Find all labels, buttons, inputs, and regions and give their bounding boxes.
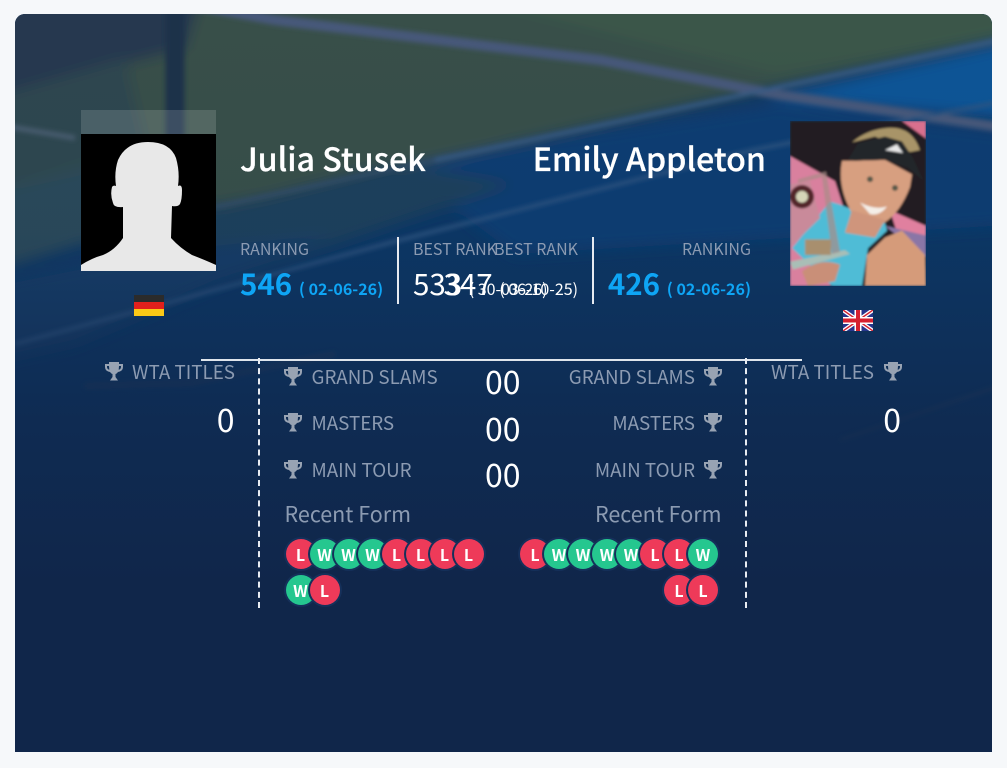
- stat: best rank right: 347 ( 06-10-25): [443, 262, 578, 304]
- divider left: [397, 237, 399, 304]
- player photo: Emily Appleton: [790, 121, 926, 286]
- value: main tour: 00: [485, 451, 521, 497]
- flag: United Kingdom: [843, 310, 873, 331]
- icon: trophy: [284, 367, 302, 386]
- row: main tour right: MAIN TOUR: [595, 456, 695, 483]
- player name: Emily Appleton: Emily Appleton: [533, 135, 766, 181]
- divider: horizontal rule: [201, 359, 802, 361]
- recent form badges: right player: [518, 537, 720, 607]
- row: main tour left: MAIN TOUR: [312, 456, 412, 483]
- recent form badges: right player: L: [650, 542, 660, 566]
- recent form badges: left player: L: [416, 542, 425, 566]
- player name: Julia Stusek: Julia Stusek: [240, 135, 426, 181]
- player photo: Julia Stusek placeholder: [81, 110, 216, 271]
- stat: best rank right: [443, 236, 578, 304]
- recent form badges: right player: W: [624, 542, 638, 566]
- recent form badges: right player: L: [674, 542, 684, 566]
- stat: ranking right: RANKING: [682, 236, 751, 260]
- recent form badges: left player: L: [320, 578, 329, 602]
- value: grand slams: 00: [485, 358, 521, 404]
- icon: trophy: [884, 362, 902, 380]
- icon: trophy: [704, 460, 722, 478]
- WTA titles: left: [105, 358, 235, 442]
- row: masters right: MASTERS: [612, 409, 695, 436]
- stat: best rank left: 533 ( 30-03-26): [413, 262, 548, 304]
- recent form badges: right player: W: [696, 542, 710, 566]
- row: masters left: MASTERS: [312, 409, 394, 436]
- stat: ranking right: [608, 236, 751, 304]
- icon: trophy: [105, 362, 123, 380]
- WTA titles: right: WTA TITLES: [771, 358, 874, 385]
- recent form badges: left player: [284, 537, 486, 607]
- divider: dashed right: [745, 358, 747, 608]
- divider right: [592, 237, 594, 304]
- stat: best rank right: BEST RANK: [494, 236, 578, 260]
- value: masters: 00: [485, 405, 521, 451]
- icon: trophy: [704, 413, 722, 432]
- heading: recent form left: Recent Form: [284, 498, 411, 529]
- stat: best rank left: BEST RANK: [413, 236, 497, 260]
- flag: Germany: [134, 295, 164, 316]
- stat: best rank left: [413, 236, 548, 304]
- stat: ranking left: 546 ( 02-06-26): [240, 262, 383, 304]
- divider: dashed left: [258, 358, 260, 608]
- recent form badges: right player: W: [576, 542, 590, 566]
- row: grand slams right: GRAND SLAMS: [569, 363, 695, 390]
- WTA titles: right: [771, 358, 902, 442]
- recent form badges: right player: W: [600, 542, 614, 566]
- WTA titles: left: WTA TITLES: [132, 358, 235, 385]
- recent form badges: left player: W: [293, 578, 308, 602]
- recent form badges: right player: W: [552, 542, 566, 566]
- stat: ranking left: [240, 236, 383, 304]
- stat: ranking right: 426 ( 02-06-26): [608, 262, 751, 304]
- recent form badges: left player: L: [392, 542, 401, 566]
- recent form badges: left player: W: [341, 542, 356, 566]
- WTA titles: left: 0: [217, 396, 234, 442]
- stat: ranking left: RANKING: [240, 236, 309, 260]
- icon: trophy: [284, 460, 302, 478]
- heading: recent form right: Recent Form: [595, 498, 722, 529]
- recent form badges: left player: L: [440, 542, 449, 566]
- recent form badges: left player: L: [296, 542, 305, 566]
- recent form badges: left player: W: [317, 542, 332, 566]
- recent form badges: right player: L: [674, 578, 684, 602]
- recent form badges: left player: L: [464, 542, 473, 566]
- recent form badges: right player: L: [698, 578, 708, 602]
- recent form badges: left player: W: [365, 542, 380, 566]
- icon: trophy: [284, 413, 302, 432]
- recent form badges: right player: L: [530, 542, 540, 566]
- icon: trophy: [704, 367, 722, 386]
- row: grand slams left: GRAND SLAMS: [312, 363, 438, 390]
- WTA titles: right: 0: [883, 396, 901, 442]
